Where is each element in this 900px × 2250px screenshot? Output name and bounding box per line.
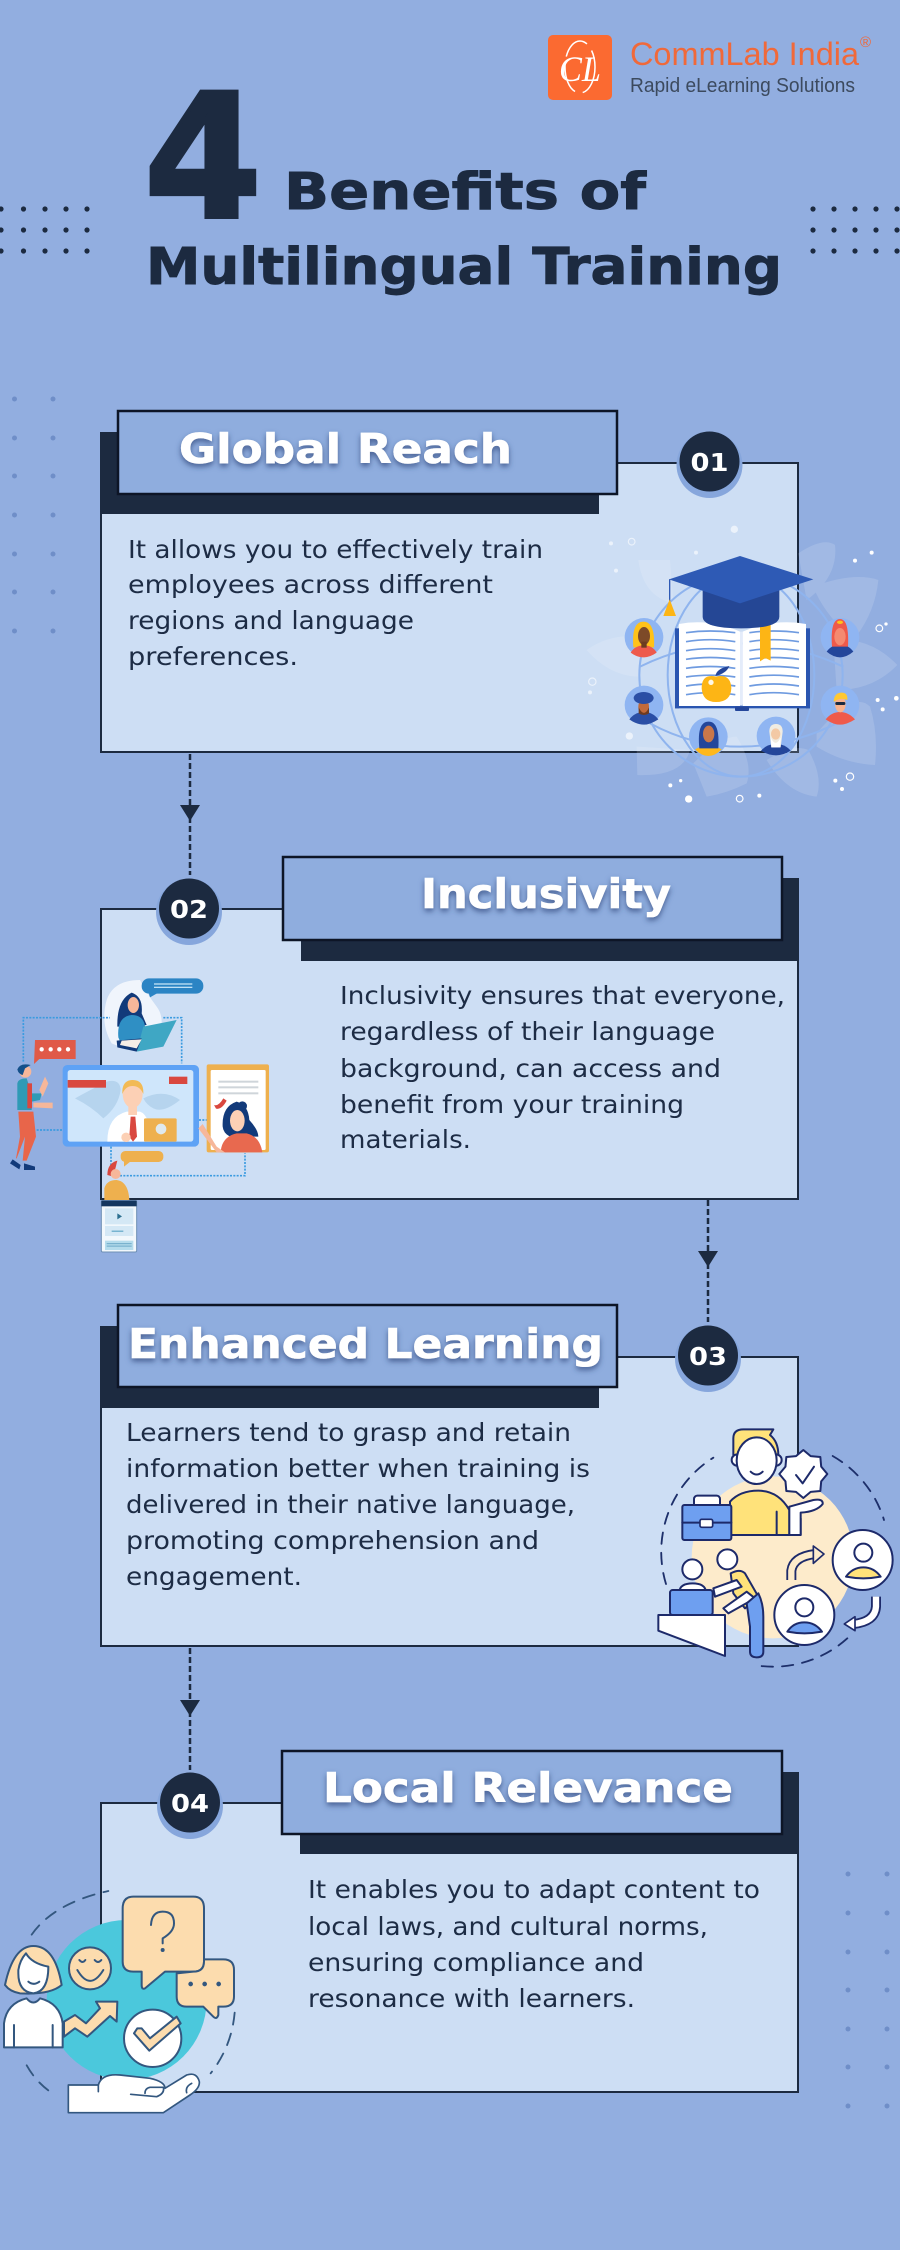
central video screen — [63, 1065, 199, 1147]
text: Enhanced Learning description: information better when training is — [126, 1454, 590, 1483]
bottom person — [104, 1161, 129, 1200]
presenter man — [10, 1064, 53, 1170]
text: Inclusivity description — [340, 981, 785, 1154]
text: Inclusivity description: regardless of their language — [340, 1017, 715, 1046]
badge: 02 — [156, 878, 222, 945]
learners at desk — [682, 1559, 702, 1579]
panel: Enhanced Learning — [100, 1305, 798, 1646]
text: Local Relevance description: It enables you to adapt content to — [308, 1875, 760, 1904]
ellipsis speech bubble — [177, 1959, 234, 2018]
heading: Local Relevance — [282, 1751, 782, 1834]
graduation cap — [663, 556, 813, 661]
arrow: 02 to 03 — [698, 1200, 718, 1322]
text: Local Relevance description — [308, 1875, 760, 2013]
text: Enhanced Learning description: Learners tend to grasp and retain — [126, 1418, 571, 1447]
badge: 04 — [157, 1772, 223, 1839]
gear — [779, 1450, 827, 1498]
text: Enhanced Learning description: engagement. — [126, 1562, 302, 1591]
arrow: 03 to 04 — [180, 1648, 200, 1770]
blue speech bubble — [142, 978, 203, 997]
icon: training team with gear and briefcase — [658, 1429, 893, 1667]
icon: online collaboration people — [10, 978, 269, 1252]
panel: Local Relevance — [101, 1751, 799, 2092]
text: Global Reach description — [128, 535, 543, 671]
logo: CommLab India: CommLab India — [630, 36, 859, 72]
heading: Global Reach — [118, 411, 617, 494]
text: Global Reach description: preferences. — [128, 642, 298, 671]
text: Inclusivity description: Inclusivity ensures that everyone, — [340, 981, 785, 1010]
title: Benefits of — [284, 163, 647, 222]
badge: 03 — [675, 1326, 741, 1392]
heading: Local Relevance: Local Relevance — [323, 1764, 733, 1812]
woman — [4, 1946, 63, 2047]
phone card — [101, 1201, 137, 1252]
question speech bubble — [123, 1897, 204, 1989]
arrow: 01 to 02 — [180, 754, 200, 875]
panel: Inclusivity — [101, 857, 799, 1199]
red speech bubble — [34, 1040, 76, 1064]
apple — [702, 666, 731, 702]
text: Enhanced Learning description: delivered in their native language, — [126, 1490, 575, 1519]
logo: CommLab India: Rapid eLearning Solutions — [630, 75, 855, 97]
logo: CommLab India: CL — [559, 49, 601, 89]
trainer — [730, 1429, 823, 1535]
avatars — [625, 618, 859, 756]
text: Global Reach description: regions and language — [128, 606, 414, 635]
text: Inclusivity description: background, can access and — [340, 1054, 721, 1083]
icon: graduation cap, book and learners — [587, 526, 899, 803]
text: Local Relevance description: local laws, and cultural norms, — [308, 1912, 708, 1941]
heading: Enhanced Learning: Enhanced Learning — [128, 1320, 603, 1368]
briefcase — [694, 1496, 720, 1509]
text: Local Relevance description: resonance with learners. — [308, 1984, 635, 2013]
logo: CommLab India — [548, 34, 871, 100]
check mark — [124, 2010, 181, 2067]
growth arrow — [64, 2002, 117, 2037]
hand — [68, 2074, 199, 2113]
panel: Global Reach — [100, 411, 798, 752]
woman with laptop — [117, 993, 177, 1052]
text: Global Reach description: It allows you to effectively train — [128, 535, 543, 564]
text: Enhanced Learning description — [126, 1418, 590, 1591]
yellow speech bubble — [121, 1151, 163, 1167]
smiley — [69, 1947, 111, 1989]
badge: 01: 01 — [690, 448, 728, 477]
heading: Enhanced Learning — [118, 1305, 617, 1387]
text: Global Reach description: employees across different — [128, 570, 493, 599]
icon: learner feedback in hand — [4, 1891, 235, 2113]
title: Multilingual Training — [146, 238, 782, 297]
badge: 01 — [676, 432, 742, 498]
text: Inclusivity description: benefit from your training — [340, 1090, 684, 1119]
badge: 04: 04 — [171, 1789, 209, 1818]
logo: CommLab India: ® — [860, 34, 871, 51]
badge: 03: 03 — [689, 1342, 727, 1371]
badge: 02: 02 — [170, 895, 208, 924]
title — [144, 57, 782, 297]
text: Enhanced Learning description: promoting comprehension and — [126, 1526, 539, 1555]
text: Inclusivity description: materials. — [340, 1125, 471, 1154]
heading: Inclusivity — [283, 857, 782, 940]
heading: Global Reach: Global Reach — [179, 425, 512, 473]
heading: Inclusivity: Inclusivity — [421, 870, 671, 918]
swap arrows and avatars — [791, 1554, 815, 1580]
book — [675, 622, 810, 711]
text: Local Relevance description: ensuring compliance and — [308, 1948, 644, 1977]
right video card — [198, 1064, 269, 1152]
title: 4 — [144, 57, 262, 258]
